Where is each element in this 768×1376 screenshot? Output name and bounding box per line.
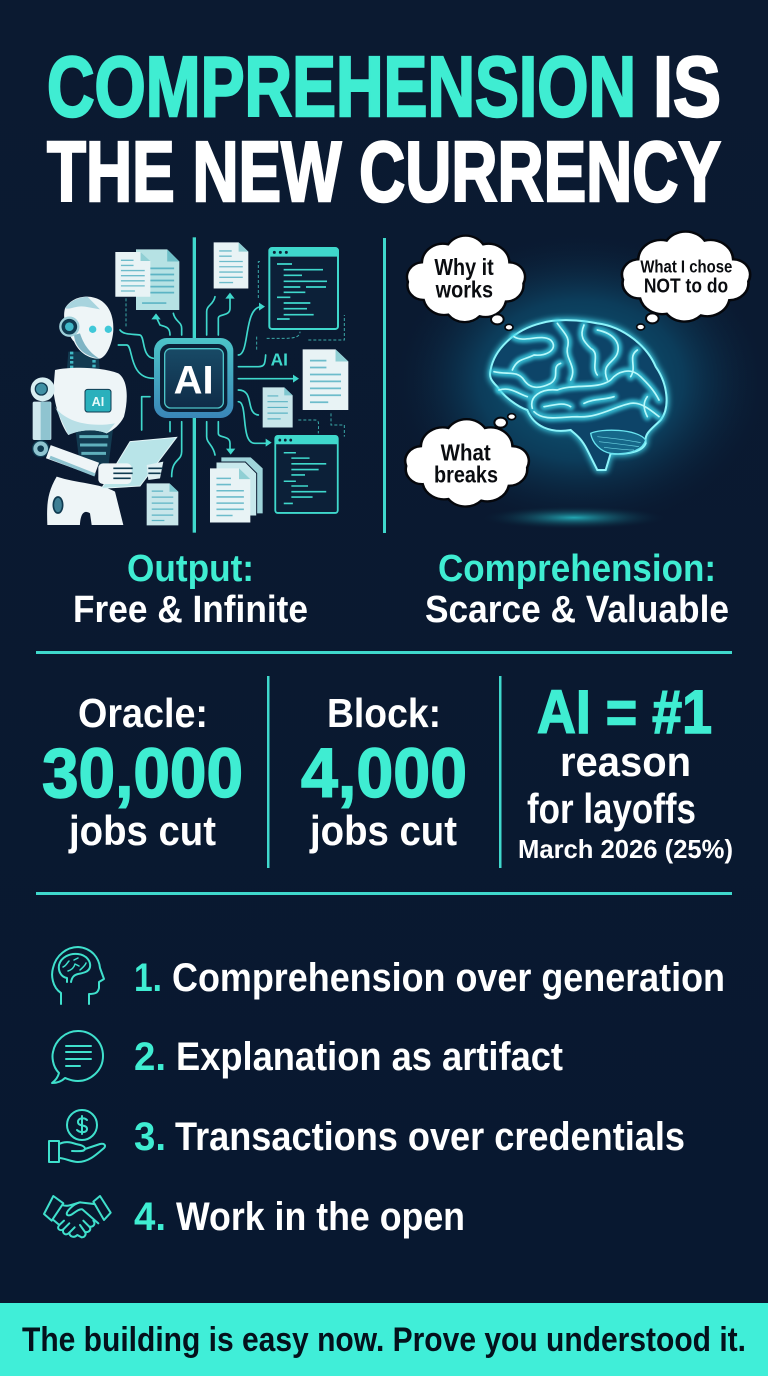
title: IS [653, 40, 721, 135]
stat: Oracle: Oracle: [78, 690, 208, 736]
icon: head with brain [52, 947, 104, 1004]
heading: output: Output: [127, 548, 254, 590]
icon: code window top [269, 248, 338, 329]
footer banner [0, 1303, 768, 1376]
list item 4: 4. [134, 1195, 166, 1239]
icon: documents top left [115, 249, 179, 310]
thought bubble: why it works: Why it [434, 254, 494, 280]
title [47, 40, 721, 220]
neck [67, 352, 100, 373]
chest badge: AI [92, 395, 104, 409]
icon: handshake [44, 1196, 111, 1237]
divider between illustrations [383, 238, 386, 533]
stat: AI number one reason: reason [560, 738, 691, 785]
list item 3: Transactions over credentials [175, 1115, 685, 1159]
list item 1: 1. [134, 956, 162, 1000]
stat: AI number one reason: March 2026 (25%) [518, 834, 733, 864]
stat: AI number one reason: AI = #1 [537, 678, 712, 746]
icon: document stack [210, 457, 263, 522]
circuit lines [118, 297, 295, 477]
stat: Block [301, 690, 467, 854]
label: AI: AI [271, 349, 288, 369]
abdomen [75, 427, 113, 467]
panel: output illustration [31, 237, 348, 533]
icon: AI chip: AI [174, 358, 214, 402]
stat: Block: jobs cut [309, 807, 457, 854]
list item 3 [49, 1110, 685, 1162]
list item 1 [52, 947, 725, 1004]
torso [53, 368, 127, 435]
arrowheads [151, 293, 299, 455]
icon: code window bottom [275, 436, 338, 513]
brain [490, 320, 667, 470]
floor glow [484, 506, 664, 529]
thought bubble: what breaks: What [441, 440, 491, 466]
thought bubble: what breaks: breaks [434, 462, 498, 488]
robot [31, 297, 177, 525]
list item 2 [52, 1031, 563, 1083]
stat: AI number one reason [518, 678, 733, 864]
thought bubble: why it works [407, 236, 525, 330]
icon: document bottom [147, 483, 178, 525]
chest badge [85, 389, 111, 412]
stat: Oracle: 30,000 [42, 734, 243, 812]
heading: comprehension: Comprehension: [438, 548, 716, 590]
icon: divider [193, 237, 196, 533]
thought bubble: what I chose not to do: What I chose [640, 256, 733, 276]
panel: comprehension illustration [394, 232, 767, 529]
list item 4: Work in the open [176, 1195, 465, 1239]
brain glow [394, 233, 767, 527]
stat: Block: 4,000 [301, 734, 467, 812]
list item 2: 2. [134, 1035, 166, 1079]
stat: Block: Block: [327, 690, 441, 736]
dashed connectors [126, 262, 344, 437]
heading: comprehension [425, 548, 729, 631]
stat: Oracle: jobs cut [68, 807, 216, 854]
list item 3: 3. [134, 1115, 166, 1159]
heading: output [73, 548, 308, 631]
icon: document top [214, 242, 248, 289]
tablet [102, 437, 177, 488]
icon: AI chip [154, 338, 233, 418]
thought bubble: why it works: works [435, 276, 493, 302]
thought bubble: what I chose not to do: NOT to do [644, 275, 728, 298]
left arm [33, 402, 51, 440]
icon: hand holding coin [49, 1110, 105, 1162]
forearm and hands [48, 452, 97, 469]
heading: output: Free & Infinite [73, 589, 308, 631]
stat: AI number one reason: for layoffs [527, 785, 696, 832]
head [64, 297, 113, 359]
icon: document right [303, 349, 348, 410]
thought bubble: what I chose not to do [622, 232, 750, 330]
icon: speech bubble [52, 1031, 103, 1083]
icon: document middle [263, 387, 293, 427]
heading: comprehension: Scarce & Valuable [425, 589, 729, 631]
hips and leg [47, 477, 123, 525]
list item 2: Explanation as artifact [176, 1035, 563, 1079]
list item 4 [44, 1195, 465, 1239]
stat: Oracle [42, 690, 243, 854]
thought bubble: what breaks [405, 414, 529, 507]
